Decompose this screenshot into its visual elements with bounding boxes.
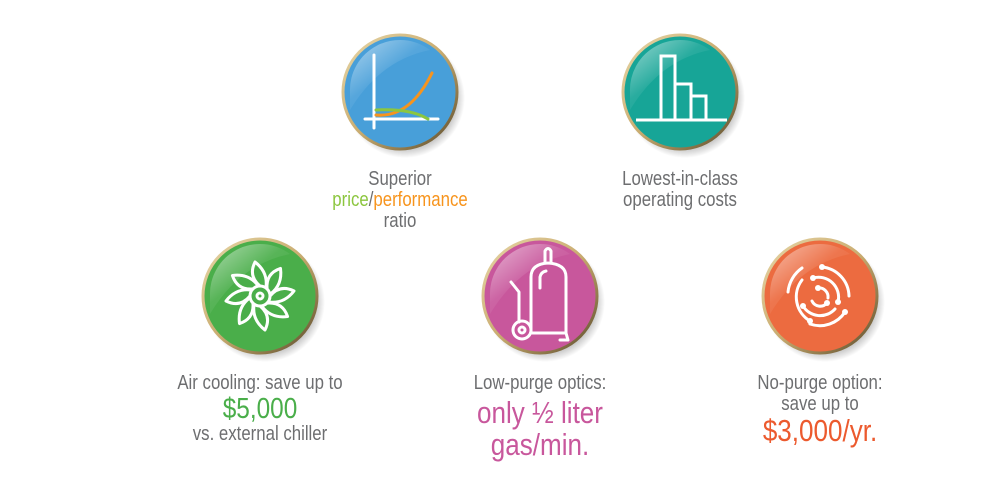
- text: air cooling: [177, 372, 343, 445]
- text: superior price/performance ratio: Superior: [368, 168, 432, 190]
- text: low-purge optics: [474, 372, 606, 462]
- text: lowest-in-class operating costs: [622, 168, 738, 211]
- text: no-purge option: No-purge option:: [757, 372, 883, 394]
- badge: no-purge option: [763, 239, 885, 362]
- text: no-purge option: save up to: [781, 393, 859, 415]
- icon: bar chart: [636, 56, 727, 120]
- badge: air cooling: [203, 239, 325, 362]
- icon: fan: [226, 262, 294, 330]
- text: low-purge optics: gas/min.: [491, 427, 589, 462]
- text: no-purge option: $3,000/yr.: [763, 413, 877, 448]
- text: low-purge optics: only ½ liter: [477, 395, 603, 430]
- badge: price/performance: [343, 35, 465, 158]
- text: air cooling: vs. external chiller: [193, 423, 327, 445]
- icon: gas cylinder cart: [511, 248, 568, 340]
- text: low-purge optics: Low-purge optics:: [474, 372, 606, 394]
- icon: orbits: [788, 264, 849, 326]
- text: superior price/performance ratio: ratio: [384, 210, 416, 232]
- icon: chart curves: [365, 55, 438, 128]
- badge: operating costs: [623, 35, 745, 158]
- text: lowest-in-class operating costs: Lowest-in-class: [622, 168, 738, 190]
- badge: low-purge optics: [483, 239, 605, 362]
- text: lowest-in-class operating costs: operating costs: [623, 189, 737, 211]
- text: air cooling: $5,000: [223, 393, 297, 425]
- text: superior price/performance ratio: [332, 168, 468, 232]
- text: superior price/performance ratio: price/performance: [332, 189, 468, 211]
- text: no-purge option: [757, 372, 883, 448]
- text: air cooling: Air cooling: save up to: [177, 372, 343, 394]
